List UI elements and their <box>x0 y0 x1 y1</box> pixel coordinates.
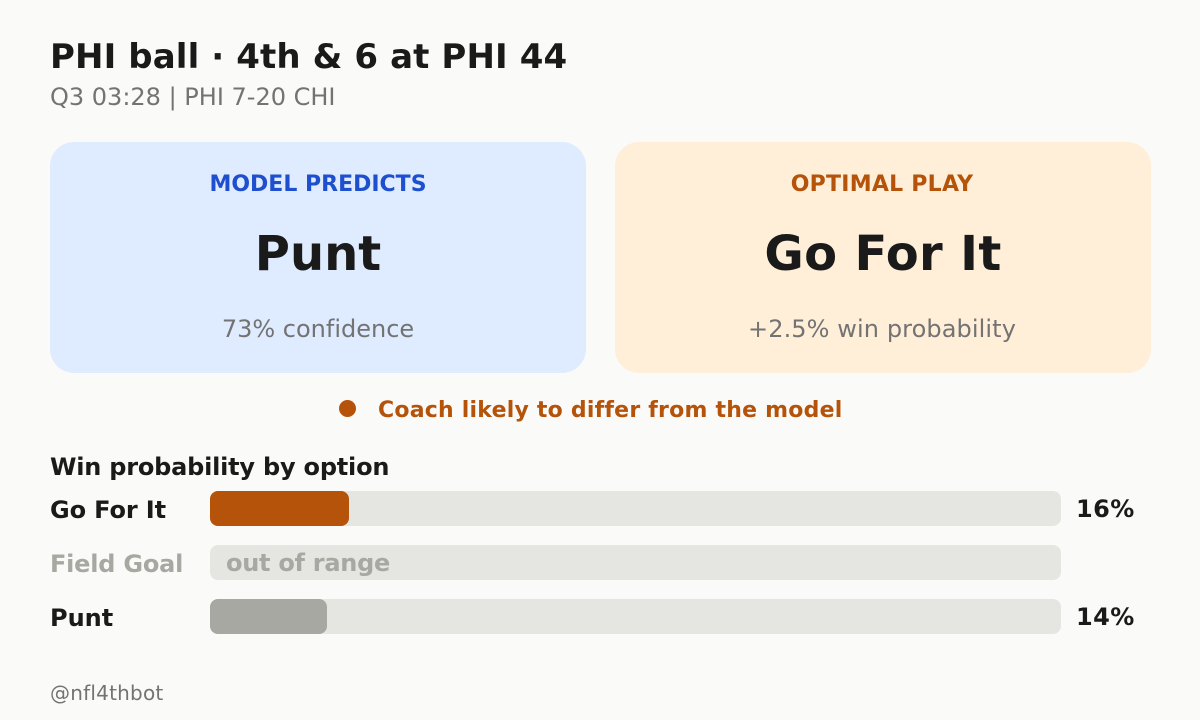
callout text: Coach likely to differ from the model <box>378 398 842 423</box>
panel label: optimal play: OPTIMAL PLAY <box>791 172 973 197</box>
bar: Punt: Punt <box>50 604 113 632</box>
footer handle: @nfl4thbot <box>50 681 164 705</box>
panel: model predicts <box>50 142 586 373</box>
bar: Go For It: 16% <box>1076 495 1135 523</box>
bar: Punt: 14% <box>1076 603 1135 631</box>
bar: Field Goal <box>50 545 1061 580</box>
bar: Go For It <box>50 491 1135 526</box>
bar: Field Goal: out of range <box>226 549 390 577</box>
bar: Field Goal: Field Goal <box>50 550 183 578</box>
bar: Punt <box>50 599 1135 634</box>
predicted play: Punt <box>255 226 381 282</box>
subtitle: Q3 03:28 | PHI 7-20 CHI <box>50 83 336 111</box>
optimal play name: Go For It <box>764 226 1002 282</box>
win probability gain: +2.5% win probability <box>748 315 1016 343</box>
bar: Go For It: Go For It <box>50 496 166 524</box>
confidence: 73% confidence <box>222 315 414 343</box>
callout: coach differs <box>339 398 842 423</box>
panel label: model predicts: MODEL PREDICTS <box>209 172 427 197</box>
section heading: Win probability by option <box>50 453 389 481</box>
title: PHI ball · 4th & 6 at PHI 44 <box>50 37 567 77</box>
bar chart <box>50 491 1135 634</box>
icon: status dot <box>339 400 356 417</box>
panel: optimal play <box>615 142 1151 373</box>
